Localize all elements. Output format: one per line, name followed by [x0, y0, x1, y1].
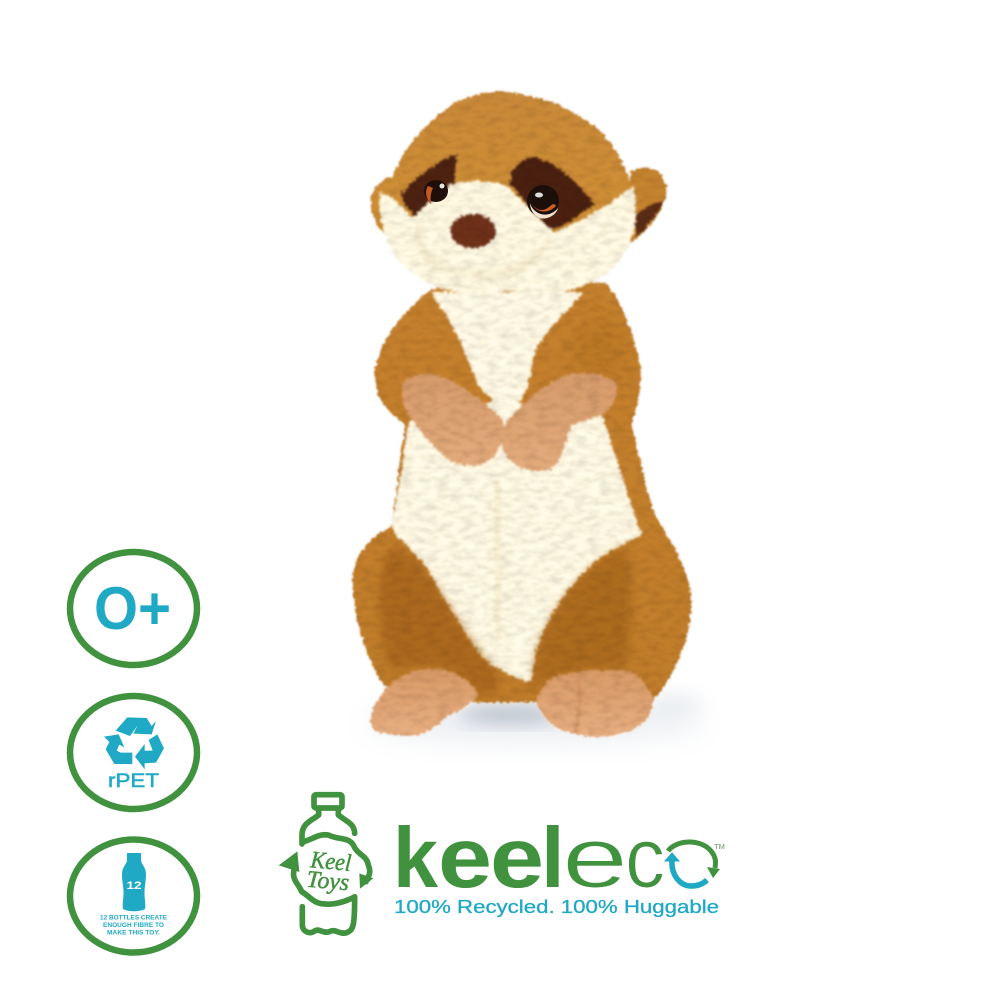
- right eye patch: [510, 157, 594, 230]
- Keel Toys wordmark: Keel: [309, 847, 353, 877]
- right ear inner: [634, 200, 664, 238]
- logo: Keel Toys bottle: [279, 795, 373, 933]
- cream face: [379, 181, 636, 294]
- icon: recycling letter o: [665, 842, 720, 886]
- plush meerkat toy: [352, 91, 692, 738]
- ec light: [562, 811, 665, 906]
- left eye: [424, 180, 448, 204]
- left leg shading: [378, 545, 498, 695]
- left foot: [370, 669, 479, 736]
- badge: age 0+: [70, 552, 197, 665]
- keel bold: e: [438, 811, 492, 906]
- belly: [391, 400, 642, 682]
- upper chest: [431, 292, 584, 410]
- right foot: [537, 670, 654, 738]
- age label: O+: [94, 575, 171, 642]
- bottle caption: MAKE THIS TOY.: [107, 930, 160, 936]
- arrowhead right: [359, 873, 373, 889]
- right ear: [630, 167, 667, 244]
- belly seam: [496, 480, 500, 640]
- right leg shading: [534, 548, 632, 690]
- bottle base: [302, 897, 355, 933]
- Keel Toys wordmark: [305, 847, 353, 896]
- left eye patch: [402, 153, 458, 220]
- floor shadow: [365, 693, 705, 742]
- keel bold: [393, 811, 565, 906]
- bottle caption: 12 BOTTLES CREATE: [100, 914, 168, 922]
- head: [371, 91, 636, 290]
- nose: [450, 214, 496, 248]
- Keel Toys wordmark: Toys: [305, 867, 350, 896]
- rPET label: rPET: [108, 771, 159, 792]
- badge: 12 bottles: [70, 840, 197, 952]
- body and legs: [352, 282, 692, 703]
- arrowhead left: [279, 851, 299, 872]
- icon: bottle with number 12: 12: [126, 880, 142, 892]
- keel bold: l: [541, 811, 565, 906]
- bottle shoulders: [302, 808, 355, 844]
- wavy recycling ring bottom: [294, 870, 354, 904]
- muzzle shading: [419, 222, 548, 275]
- bottle cap: [314, 795, 342, 808]
- ec light: c: [625, 811, 665, 906]
- bottle caption: ENOUGH FIBRE TO: [103, 922, 164, 929]
- right arm: [501, 373, 617, 471]
- icon: recycling arrows: [104, 717, 164, 769]
- keel bold: e: [490, 811, 544, 906]
- wavy recycling ring top: [303, 835, 370, 882]
- bottle caption: [100, 914, 168, 936]
- logo: keeleco wordmark: [393, 811, 725, 906]
- badge: rPET recycled: [70, 696, 197, 809]
- ec light: e: [562, 811, 628, 906]
- tagline: 100% Recycled. 100% Huggable: [394, 896, 719, 917]
- right foot toe shading: [575, 680, 580, 734]
- left arm: [402, 374, 504, 466]
- right eye: [527, 185, 559, 219]
- keel bold: k: [393, 811, 439, 906]
- shoulder shading: [572, 316, 628, 384]
- trademark: TM: [714, 842, 725, 851]
